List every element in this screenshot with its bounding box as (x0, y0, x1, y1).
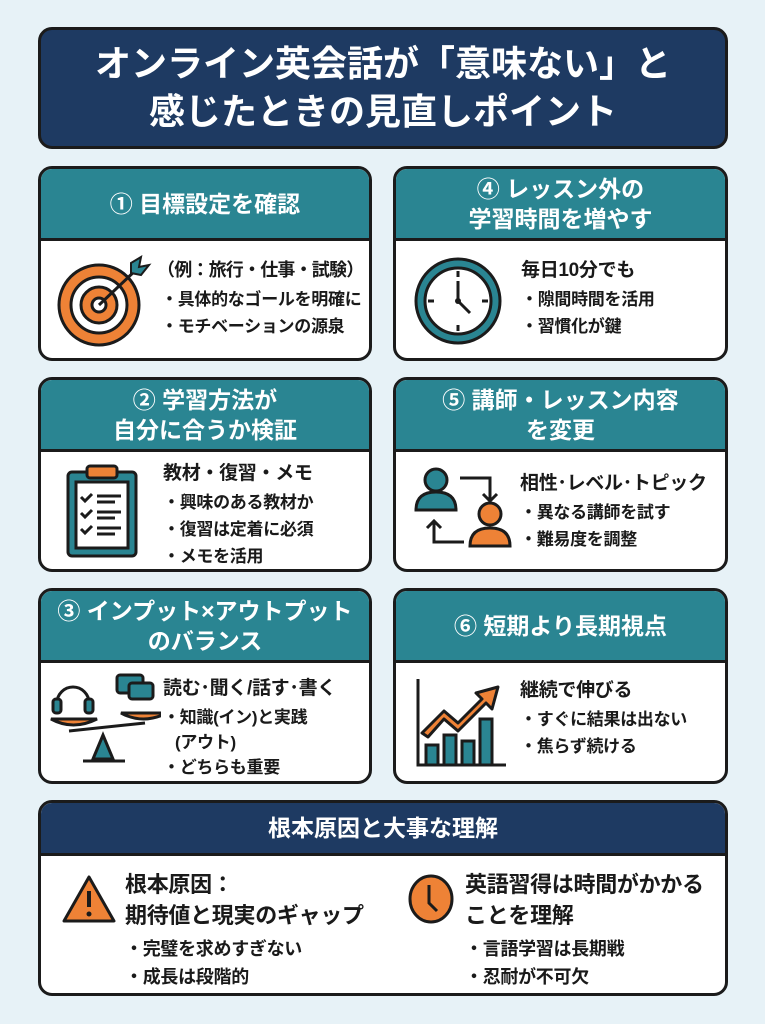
icon: growth chart (416, 679, 506, 766)
text: root cause (125, 872, 364, 987)
heading 5: を変更 (526, 416, 595, 442)
title (38, 27, 728, 149)
text 4: 毎日10分でも (521, 260, 635, 281)
panel: 2 method (38, 377, 372, 572)
text 2: 教材・復習・メモ (163, 463, 313, 484)
text 6: 継続で伸びる (520, 680, 632, 701)
panel: 3 balance (38, 588, 372, 784)
heading bottom (41, 803, 725, 856)
heading 3 (41, 591, 369, 663)
heading 2: 自分に合うか検証 (113, 416, 297, 442)
text: understanding: ・言語学習は長期戦 (465, 939, 624, 959)
text 6: ・すぐに結果は出ない (520, 710, 687, 729)
text 2 (163, 462, 314, 566)
text 4: ・習慣化が鍵 (521, 317, 621, 336)
icon: orange clock (408, 874, 454, 924)
text: root cause: ・成長は段階的 (125, 967, 249, 987)
text 3: 読む･聞く/話す･書く (163, 678, 336, 699)
panel: 5 teacher (393, 377, 728, 572)
title: オンライン英会話が「意味ない」と (95, 43, 671, 84)
text 4 (521, 260, 655, 336)
heading 5 (396, 380, 725, 452)
text 5 (520, 472, 707, 549)
text 3: ・知識(イン)と実践 (163, 708, 307, 727)
heading 3: のバランス (148, 628, 262, 654)
icon: swap people (414, 468, 512, 548)
text 4: ・隙間時間を活用 (521, 290, 655, 309)
text 2: ・復習は定着に必須 (163, 520, 313, 539)
text: root cause: 根本原因： (125, 872, 234, 897)
heading 4 (396, 169, 725, 241)
text 1: ・モチベーションの源泉 (161, 317, 344, 336)
text 5: 相性･レベル･トピック (520, 473, 707, 494)
text: root cause: ・完璧を求めすぎない (125, 939, 302, 959)
heading 2 (41, 380, 369, 452)
text 3: ・どちらも重要 (163, 758, 280, 777)
heading 4: 学習時間を増やす (468, 206, 652, 232)
panel: 1 goal (38, 166, 372, 361)
heading 6: ⑥ 短期より長期視点 (454, 612, 667, 638)
text 3: (アウト) (175, 733, 236, 752)
text 3 (163, 678, 336, 777)
text: understanding (465, 872, 704, 987)
title: 感じたときの見直しポイント (149, 91, 617, 132)
heading 1: ① 目標設定を確認 (110, 190, 300, 216)
panel: root cause (38, 800, 728, 996)
heading 6 (396, 591, 725, 663)
panel: 6 long term (393, 588, 728, 784)
icon: clipboard (66, 464, 138, 558)
text 5: ・異なる講師を試す (520, 503, 670, 522)
text 1 (157, 260, 363, 336)
text 1: ・具体的なゴールを明確に (161, 290, 361, 309)
text 1: （例：旅行・仕事・試験） (157, 260, 363, 280)
heading 2: ② 学習方法が (133, 386, 277, 412)
text: understanding: 英語習得は時間がかかる (465, 872, 704, 897)
heading 5: ⑤ 講師・レッスン内容 (442, 386, 679, 412)
icon: warning (62, 875, 116, 922)
text: root cause: 期待値と現実のギャップ (125, 903, 364, 928)
heading 3: ③ インプット×アウトプット (57, 598, 353, 624)
icon: clock (414, 258, 502, 344)
heading 1 (41, 169, 369, 241)
text 5: ・難易度を調整 (520, 530, 637, 549)
text 6 (520, 680, 687, 756)
text 2: ・興味のある教材か (163, 493, 313, 512)
panel: 4 study time (393, 166, 728, 361)
text: understanding: ことを理解 (465, 903, 574, 928)
heading 4: ④ レッスン外の (477, 176, 644, 202)
text 2: ・メモを活用 (163, 547, 263, 566)
text 6: ・焦らず続ける (520, 737, 637, 756)
text: understanding: ・忍耐が不可欠 (465, 967, 589, 987)
icon: target (58, 255, 152, 346)
heading bottom: 根本原因と大事な理解 (268, 815, 498, 841)
icon: scale (50, 674, 161, 762)
